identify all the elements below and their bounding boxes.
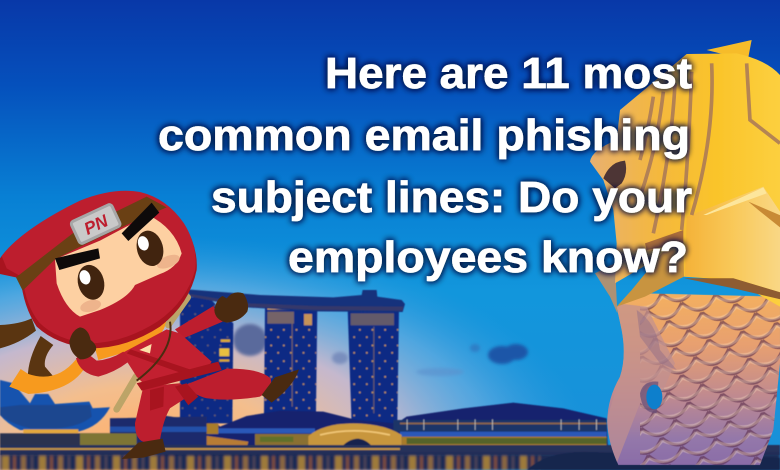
- clouds: [233, 324, 528, 376]
- title: Here are 11 most: [325, 49, 692, 98]
- right tower: [348, 308, 399, 425]
- bay water: [0, 454, 780, 470]
- standing leg: [135, 383, 193, 443]
- torso: [122, 329, 212, 383]
- eyebrows: [55, 203, 159, 270]
- cheeks: [79, 252, 182, 314]
- promenade: [0, 445, 780, 455]
- orange scarf: [9, 318, 167, 394]
- chest sash: [127, 349, 192, 375]
- sword: [117, 297, 188, 409]
- mane grooves: [640, 63, 780, 233]
- headband: [16, 197, 167, 291]
- headband plate with PN: PN: [81, 210, 112, 239]
- ninja mascot: [0, 191, 299, 459]
- Merlion tail and fish-scale body: [595, 263, 780, 470]
- standing foot: [122, 439, 166, 459]
- chest collar: [139, 344, 152, 353]
- headband plate with PN: [70, 204, 121, 244]
- hood: [0, 191, 197, 348]
- lowered mitt: [69, 327, 96, 359]
- lowered arm: [76, 352, 131, 377]
- title: common email phishing: [158, 111, 690, 160]
- tail hole: [640, 381, 662, 413]
- eyes: [74, 228, 167, 303]
- skypark deck: [187, 289, 405, 312]
- left tail base: [595, 263, 617, 313]
- Merlion mane and head: [590, 40, 780, 307]
- waterfront buildings: [160, 403, 608, 457]
- belt: [137, 362, 222, 411]
- extended leg: [185, 369, 271, 400]
- face: [55, 215, 182, 317]
- bow string: [137, 322, 171, 381]
- raised arm: [175, 306, 223, 338]
- left tower: [180, 297, 233, 423]
- rear tails: [0, 318, 55, 390]
- ArtScience Museum: [0, 380, 207, 447]
- title: subject lines: Do your: [211, 173, 692, 222]
- Merlion statue: [590, 40, 780, 470]
- mouth: [603, 161, 626, 188]
- raised mitt: [214, 292, 248, 323]
- middle tower: [264, 307, 317, 415]
- title: [158, 49, 692, 282]
- skyline: Marina Bay Sands and waterfront: [0, 289, 780, 470]
- extended foot: [262, 369, 299, 403]
- title: employees know?: [288, 233, 688, 282]
- foreground quay: [527, 452, 780, 470]
